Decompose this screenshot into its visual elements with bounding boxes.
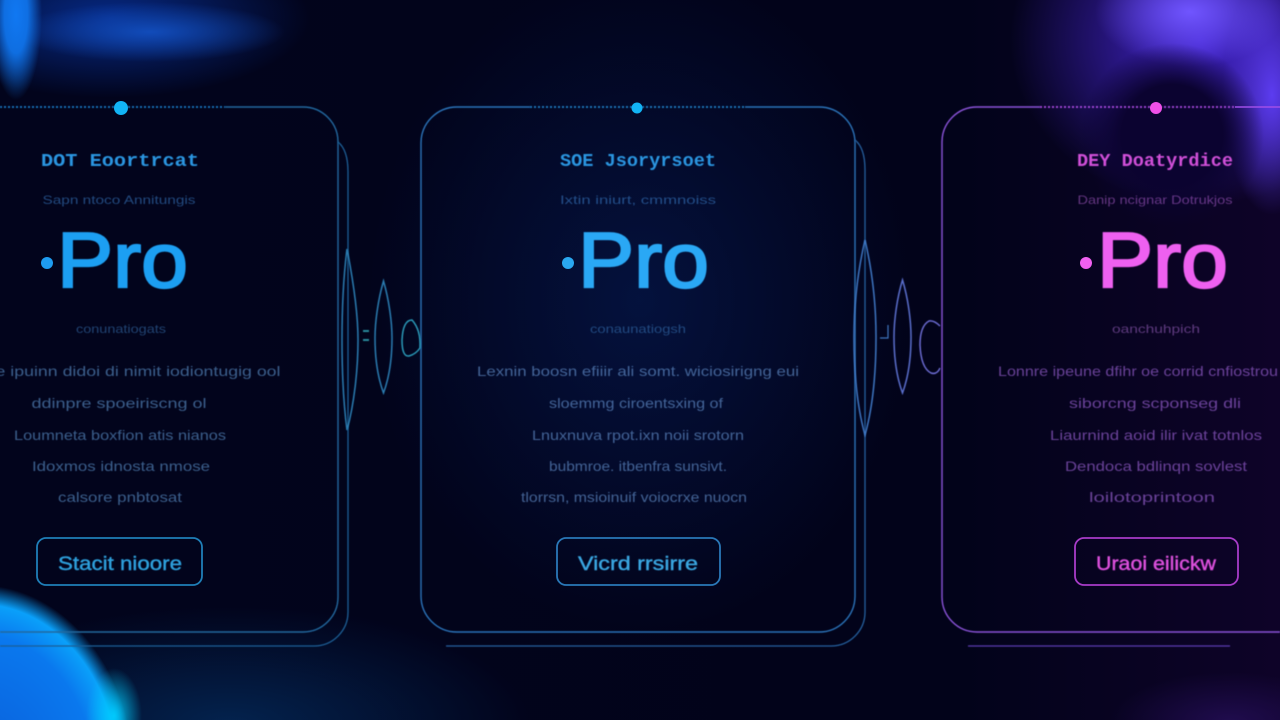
panel: center card: [421, 102, 865, 646]
body text: [0, 363, 280, 505]
heading: DEY Doatyrdice: [1077, 152, 1233, 172]
top node: [1150, 102, 1162, 114]
body text: tlorrsn, msioinuif voiocrxe nuocn: [521, 489, 747, 505]
top dotted line: [0, 106, 225, 108]
body text: Lonnre ipeune dfihr oe corrid cnfiostrou: [998, 363, 1278, 379]
body text: siborcng scponseg dli: [1069, 395, 1241, 411]
top dotted line: [1040, 106, 1235, 108]
button: [557, 538, 720, 585]
subheading: Ixtin iniurt, cmmnoiss: [560, 193, 716, 207]
body text: [998, 363, 1278, 505]
caption: oanchuhpich: [1112, 322, 1200, 336]
body text: Liaurnind aoid ilir ivat totnlos: [1050, 427, 1262, 443]
body text: Lexnin boosn efiiir ali somt. wiciosirigng eui: [477, 363, 799, 379]
subheading: Danip ncignar Dotrukjos: [1078, 193, 1232, 207]
body text: Dendoca bdlinqn sovlest: [1065, 458, 1247, 474]
subheading: Sapn ntoco Annitungis: [42, 193, 196, 207]
body text: Idoxmos idnosta nmose: [32, 458, 210, 474]
body text: ddinpre spoeiriscng ol: [32, 395, 206, 411]
connector mark: [880, 325, 888, 338]
top node: [632, 102, 642, 114]
card outline: [421, 107, 855, 632]
body text: e ipuinn didoi di nimit iodiontugig ool: [0, 363, 280, 379]
button: Vicrd rrsirre: [578, 554, 698, 575]
button: [1075, 538, 1238, 585]
caption: conunatiogats: [76, 322, 166, 336]
heading: DOT Eoortrcat: [41, 152, 199, 172]
button: Stacit nioore: [58, 554, 182, 575]
top dotted line: [530, 106, 745, 108]
card top right line: [1235, 106, 1280, 108]
card outline: [0, 107, 338, 632]
pro price: Pro: [57, 216, 188, 304]
back card outline: [968, 645, 1230, 647]
panel: left card: [0, 101, 348, 646]
button: [37, 538, 202, 585]
ring medium: [375, 281, 392, 393]
body text: calsore pnbtosat: [58, 489, 182, 505]
pro price: Pro: [578, 216, 709, 304]
ring medium: [894, 280, 911, 393]
button: Uraoi eilickw: [1096, 554, 1216, 575]
body text: [477, 363, 799, 505]
back card outline: [0, 142, 348, 646]
ring small: [920, 321, 940, 373]
caption: conaunatiogsh: [590, 322, 686, 336]
connector: left rings: [342, 249, 420, 430]
body text: loilotoprintoon: [1089, 489, 1215, 505]
ring small: [402, 320, 420, 356]
heading: SOE Jsoryrsoet: [560, 152, 716, 172]
card outline: [942, 107, 1280, 632]
connector marks: [363, 331, 369, 340]
ring large: [854, 240, 876, 435]
ring large: [342, 249, 358, 430]
body text: Lnuxnuva rpot.ixn noii srotorn: [532, 427, 744, 443]
top node: [114, 101, 128, 115]
connector: right rings: [854, 240, 940, 435]
pro price: Pro: [1097, 216, 1228, 304]
body text: Loumneta boxfion atis nianos: [14, 427, 226, 443]
body text: sloemmg ciroentsxing of: [549, 395, 723, 411]
body text: bubmroe. itbenfra sunsivt.: [549, 458, 727, 474]
back card outline: [446, 140, 865, 646]
panel: right card: [942, 102, 1280, 646]
